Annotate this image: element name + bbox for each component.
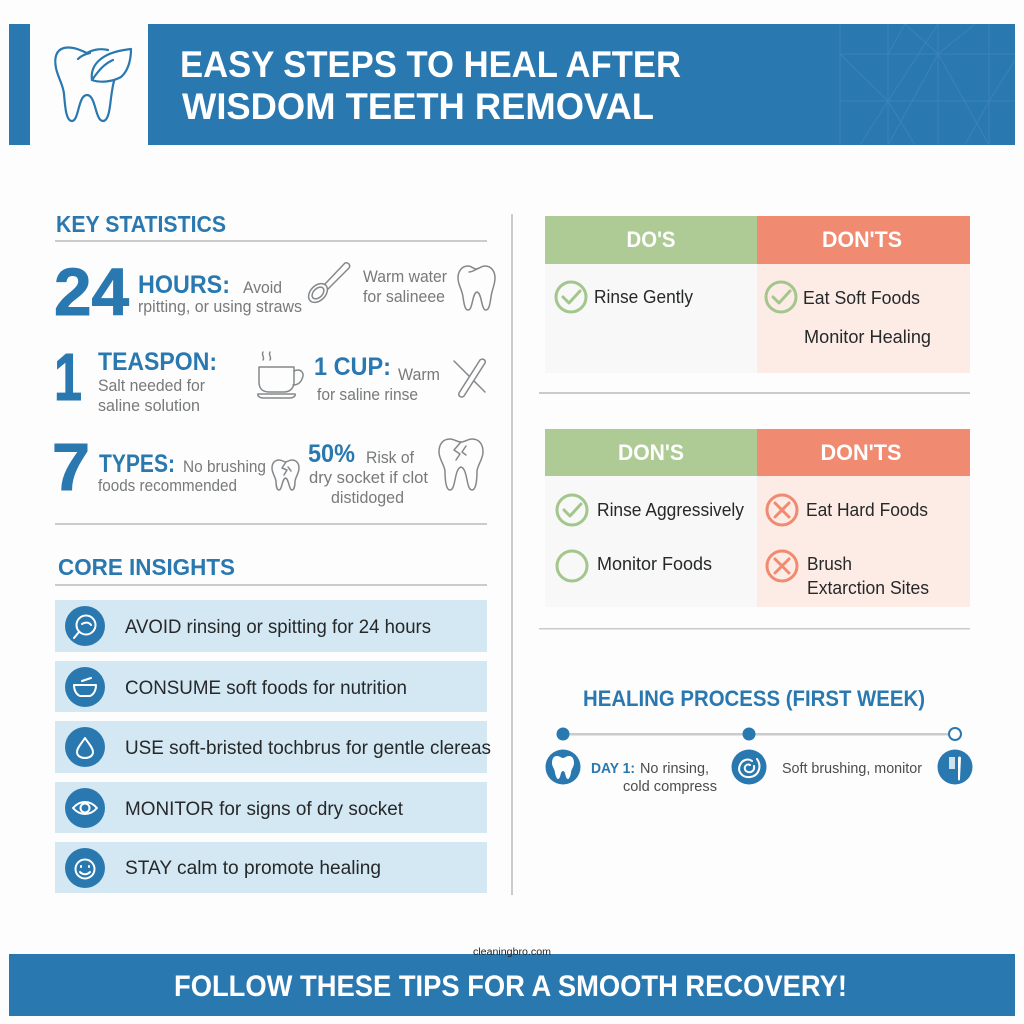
panel: do's and don'ts table 1 [545,216,970,373]
stat: warm water [363,268,447,306]
insight row: use: USE soft-bristed tochbrus for gentle clereas [125,738,491,759]
header banner [9,24,1015,145]
panel: do's and don'ts table 1: DO'S [626,227,676,252]
stat: 1 teaspoon: TEASPON: [98,348,217,376]
stat: 24 hours: Avoid [243,279,282,297]
heading: healing process: HEALING PROCESS (FIRST WEEK) [583,686,925,711]
text: day 1 [591,760,717,795]
stat: 7 types: No brushing [183,458,266,476]
insight row: avoid: AVOID rinsing or spitting for 24 hours [125,617,431,638]
insight row: consume [55,661,487,712]
icon: cross [767,551,797,581]
icon: swirl badge [732,750,766,784]
icon: spoon [305,263,350,306]
source credit: cleaningbro.com [473,947,551,958]
icon: cup [258,352,303,398]
icon: toothbrush badge [938,750,972,784]
stat: 50 percent: distidoged [331,489,404,507]
title: EASY STEPS TO HEAL AFTER [180,44,681,85]
panel: do's and don'ts table 1: DON'TS [822,227,902,252]
insight row: avoid [55,600,487,652]
stat: 50 percent [308,440,428,507]
stat: 1 cup: 1 CUP: [314,353,391,381]
footer banner [9,954,1015,1016]
stat: 1 cup: for saline rinse [317,386,418,404]
icon: empty circle [557,551,587,581]
panel: do's and don'ts table 2: Rinse Aggressively [597,499,745,520]
timeline [556,728,961,740]
stat: warm water: for salineee [363,288,445,306]
panel: do's and don'ts table 1: Eat Soft Foods [803,287,920,308]
stat: 24 hours: HOURS: [138,271,230,299]
title [180,44,681,127]
panel: do's and don'ts table 2: DON'S [618,440,684,465]
icon: cross [767,495,797,525]
insight row: monitor: MONITOR for signs of dry socket [125,799,404,820]
text: day 1: No rinsing, [640,760,709,777]
icon: tooth badge [546,750,580,784]
insight row: consume: CONSUME soft foods for nutrition [125,678,407,699]
panel: do's and don'ts table 2: Eat Hard Foods [806,499,928,520]
panel: do's and don'ts table 1: Rinse Gently [594,286,694,307]
heading: key statistics: KEY STATISTICS [56,211,226,237]
text: day 1: DAY 1: [591,760,635,777]
stat: 50 percent: dry socket if clot [309,469,428,487]
stat: 24 hours: 24 [54,255,129,330]
stat: warm water: Warm water [363,268,447,286]
panel: do's and don'ts table 2 [545,429,970,607]
panel: do's and don'ts table 2: DON'TS [820,440,902,465]
stat: 1 teaspoon: saline solution [98,397,200,415]
panel: do's and don'ts table 1: Monitor Healing [804,326,931,347]
stat: 50 percent: Risk of [366,449,414,467]
footer banner: FOLLOW THESE TIPS FOR A SMOOTH RECOVERY! [174,970,847,1003]
icon: tooth with leaf [55,47,131,121]
insight row: stay calm [55,842,487,893]
icon: small broken tooth [272,460,299,490]
icon: crossed straw [454,359,485,397]
stat: 24 hours [54,255,302,330]
stat: 7 types: TYPES: [99,450,175,478]
stat: 7 types: foods recommended [98,477,237,495]
panel: do's and don'ts table 2: Monitor Foods [597,553,712,574]
panel: do's and don'ts table 2: Extarction Sites [807,577,929,598]
icon: tooth [458,266,495,310]
stat: 7 types [52,430,266,505]
text: soft brushing: Soft brushing, monitor [782,760,922,777]
stat: 7 types: 7 [52,430,90,505]
title: WISDOM TEETH REMOVAL [182,86,654,127]
icon: broken tooth [439,439,483,490]
insight row: stay calm: STAY calm to promote healing [125,858,381,879]
panel: do's and don'ts table 2: Brush [807,553,852,574]
insight row: monitor [55,782,487,833]
insight row: use [55,721,491,773]
icon: check [557,495,587,525]
heading: core insights: CORE INSIGHTS [58,554,235,580]
stat: 1 teaspoon: Salt needed for [98,377,205,395]
text: day 1: cold compress [623,778,717,795]
stat: 1 cup: Warm [398,366,440,384]
stat: 1 teaspoon [54,340,217,415]
stat: 50 percent: 50% [308,440,355,468]
stat: 1 cup [314,353,440,404]
stat: 1 teaspoon: 1 [54,340,82,415]
icon: check [556,282,586,312]
stat: 24 hours: rpitting, or using straws [138,298,302,316]
icon: check [766,282,796,312]
